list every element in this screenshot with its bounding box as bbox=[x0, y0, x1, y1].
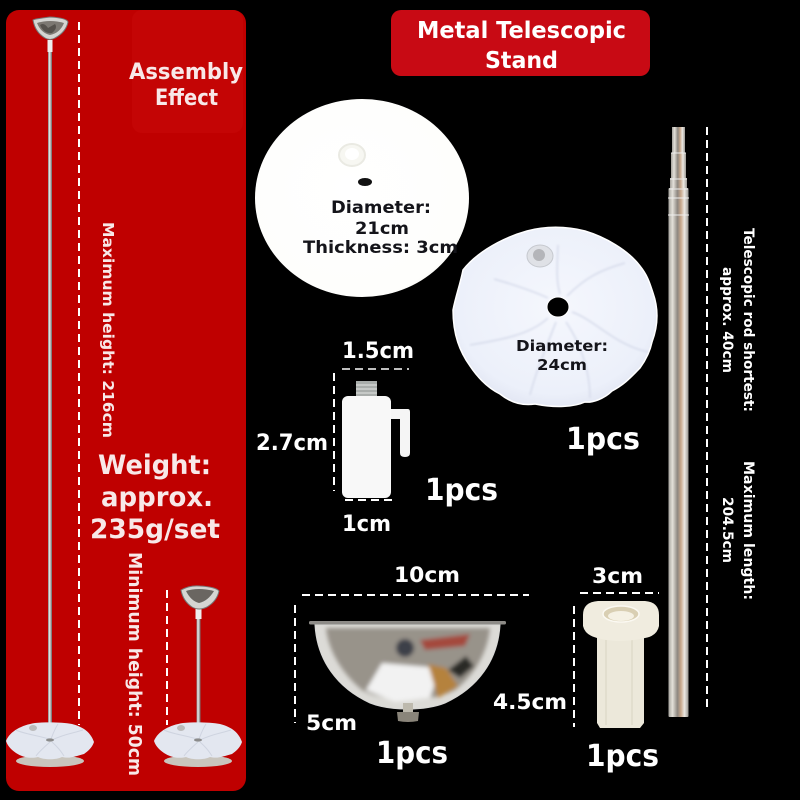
adapter dimensions: 1.5cm bbox=[342, 339, 414, 364]
cap dimensions bbox=[493, 564, 659, 727]
label: maximum length: Maximum length: bbox=[740, 461, 756, 600]
dimension line: maximum height bbox=[78, 22, 80, 725]
quantity: bag: 1pcs bbox=[566, 422, 640, 457]
plastic socket cap bbox=[583, 601, 659, 728]
label: weight: Weight: bbox=[98, 450, 211, 481]
bowl dimensions: 10cm bbox=[394, 563, 460, 587]
white round base disc bbox=[255, 99, 469, 297]
centre hole bbox=[547, 297, 569, 317]
label: weight: 235g/set bbox=[90, 514, 220, 545]
cap dimensions: 3cm bbox=[592, 564, 643, 588]
dimension line: minimum height bbox=[166, 590, 168, 725]
title panel: Stand bbox=[485, 48, 558, 74]
telescopic rod bbox=[668, 127, 689, 717]
cap dimensions: 4.5cm bbox=[493, 690, 567, 714]
label: maximum height: Maximum height: 216cm bbox=[99, 222, 117, 438]
disc dimensions text: Diameter: bbox=[331, 198, 431, 218]
label: rod shortest: approx. 40cm bbox=[719, 267, 735, 373]
disc dimensions text: Thickness: 3cm bbox=[303, 238, 458, 258]
heading: assembly effect: Assembly bbox=[129, 60, 243, 85]
panel: assembly effect bbox=[6, 10, 246, 791]
tall stand at maximum height bbox=[6, 17, 94, 767]
bowl dimensions: 5cm bbox=[306, 711, 357, 735]
heading: assembly effect: Effect bbox=[155, 86, 218, 111]
inflatable water bag base bbox=[453, 227, 657, 406]
label: weight bbox=[90, 450, 220, 545]
adapter dimensions: 1cm bbox=[342, 512, 391, 537]
heading tint: assembly effect bbox=[132, 10, 243, 133]
label: minimum height: Minimum height: 50cm bbox=[124, 552, 145, 776]
label: weight: approx. bbox=[101, 482, 213, 513]
title panel: Metal Telescopic bbox=[417, 18, 626, 44]
bowl dimensions bbox=[295, 563, 529, 735]
label: rod shortest: Telescopic rod shortest: bbox=[740, 228, 756, 412]
quantity: cap: 1pcs bbox=[586, 739, 659, 774]
chrome bowl bbox=[309, 621, 506, 722]
bag dimensions text: Diameter: bbox=[516, 337, 608, 355]
quantity: adapter: 1pcs bbox=[425, 473, 498, 508]
collar bbox=[339, 144, 365, 166]
quantity: bowl: 1pcs bbox=[376, 736, 448, 771]
dimension line: telescopic rod bbox=[706, 127, 708, 712]
disc dimensions text: 21cm bbox=[355, 219, 409, 239]
adapter dimensions: 2.7cm bbox=[256, 431, 328, 456]
centre hole bbox=[358, 178, 372, 186]
label: maximum length bbox=[719, 461, 756, 600]
valve bbox=[527, 245, 553, 267]
bag dimensions text: 24cm bbox=[537, 356, 587, 374]
disc dimensions text bbox=[303, 198, 458, 258]
label: rod shortest bbox=[719, 228, 756, 412]
threaded white adapter bbox=[342, 381, 410, 498]
short stand at minimum height bbox=[154, 586, 242, 767]
label: maximum length: 204.5cm bbox=[719, 497, 735, 563]
adapter dimensions bbox=[256, 339, 414, 537]
bag dimensions text bbox=[516, 337, 608, 374]
title panel bbox=[391, 10, 650, 76]
heading: assembly effect bbox=[129, 60, 243, 111]
